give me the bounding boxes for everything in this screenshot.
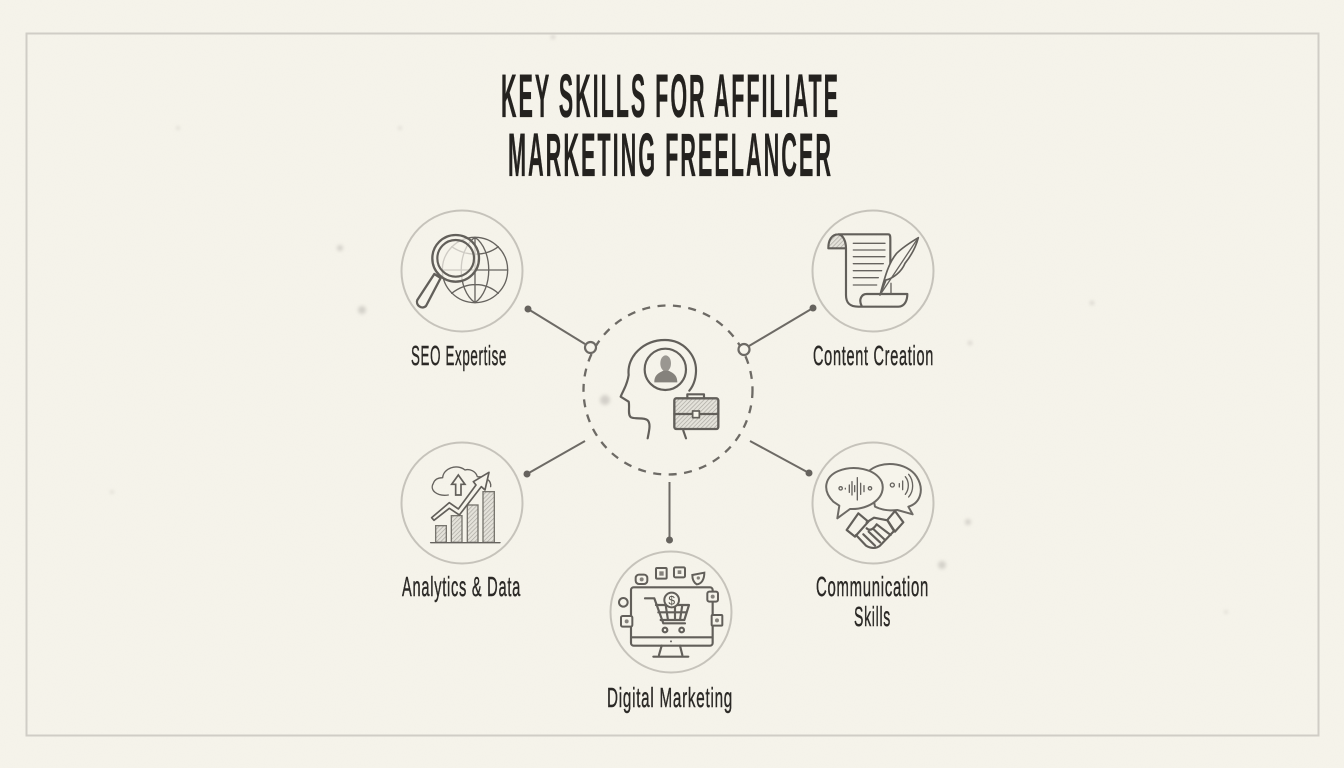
panel: Analytics & Data [402,442,522,602]
label: Analytics & Data [402,571,521,602]
panel: Digital Marketing [607,552,733,713]
panel: Content Creation [812,210,934,371]
label: Communication [816,571,929,602]
icon: magnifier over globe [417,235,508,307]
label: Skills [854,601,891,632]
connector: Analytics & Data [524,441,585,478]
connector: Communication Skills [750,441,812,476]
icon: scroll and quill [828,234,918,307]
label: Digital Marketing [607,682,733,713]
connector: SEO Expertise [524,306,596,353]
panel: SEO Expertise [402,210,522,371]
icon: speech bubbles and handshake [826,464,921,548]
icon: rising bar chart with cloud [431,467,500,543]
central hub [584,306,752,474]
panel: Communication Skills [812,442,934,632]
label: Content Creation [813,340,934,371]
connector: Content Creation [738,304,816,355]
panel: SEO Expertise: SEO Expertise [411,340,507,371]
title [501,62,840,189]
icon: head with briefcase [621,340,718,438]
icon: monitor with shopping cart: $ [668,593,675,607]
connector: Digital Marketing [666,482,673,544]
label [816,571,929,632]
icon: monitor with shopping cart [619,567,722,657]
